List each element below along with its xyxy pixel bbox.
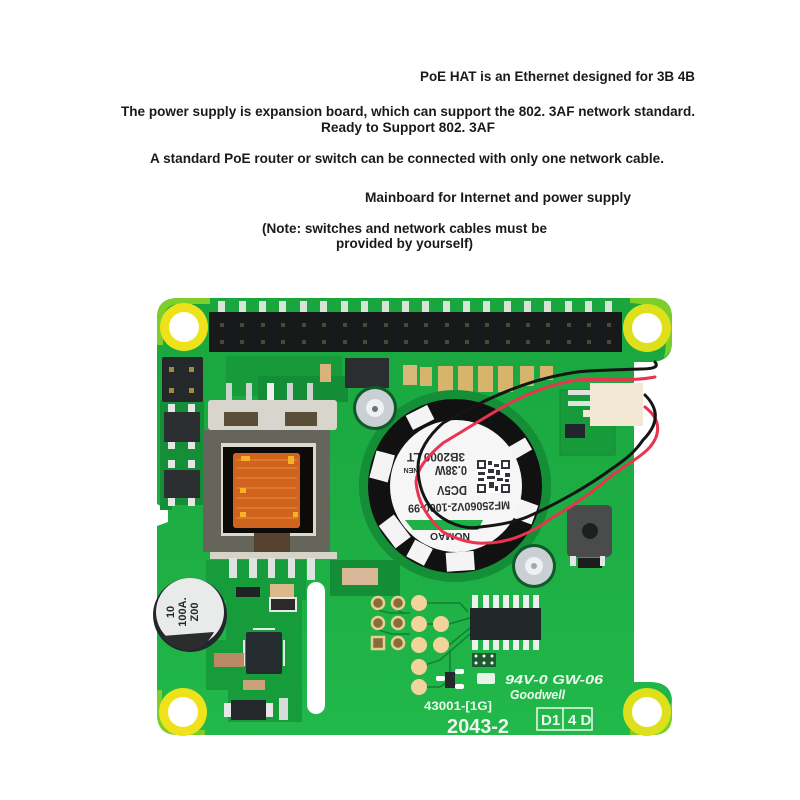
solder test pads [372, 595, 470, 695]
small SMD transistors on left [164, 404, 200, 506]
fan blades [369, 405, 538, 572]
description text block: (Note: switches and network cables must be [262, 220, 547, 236]
silkscreen text: 2043-2 [447, 716, 509, 738]
silkscreen text: Goodwell [510, 687, 565, 702]
electrolytic capacitor: 100A. [177, 597, 189, 627]
40-pin GPIO header [209, 301, 622, 352]
MOSFET near header [320, 358, 417, 388]
description text block: Ready to Support 802. 3AF [321, 119, 495, 135]
UL mark [477, 673, 495, 684]
fan sticker text [404, 450, 510, 514]
description text block: provided by yourself) [336, 235, 473, 251]
fan power wires [416, 362, 658, 543]
small passive components near chip [214, 568, 378, 690]
electrolytic capacitor: 10 [165, 606, 177, 618]
bottom diode [224, 698, 288, 720]
description text block [121, 68, 695, 251]
fan sticker text: MF25060V2-1000-99 [408, 498, 510, 514]
fan sticker text: 3B2000 LT [406, 450, 465, 464]
description text block: Mainboard for Internet and power supply [365, 189, 631, 205]
darker copper traces [160, 356, 615, 722]
QFN controller chip [243, 628, 285, 674]
silkscreen text: 4 D [568, 712, 592, 729]
fan bottom label strip [405, 520, 483, 541]
silkscreen text: 43001-[1G] [424, 699, 492, 713]
board slot cutout [307, 582, 325, 714]
mounting holes [159, 303, 671, 736]
board outline [157, 298, 672, 735]
fan sticker text: DC5V [437, 483, 467, 498]
fan sticker text: NEN [404, 466, 418, 473]
fan bottom label strip: NOMAO [430, 530, 470, 541]
description text block: A standard PoE router or switch can be connected with only one network cable. [150, 150, 664, 166]
fan sticker text: 0.38W [434, 463, 467, 478]
SOIC chip [470, 595, 541, 667]
silkscreen text: D1 [541, 712, 560, 729]
row of SMD capacitors [420, 366, 553, 392]
cooling fan [359, 390, 551, 582]
description text block: PoE HAT is an Ethernet designed for 3B 4B [420, 68, 695, 84]
SOT-23 small transistor [436, 669, 464, 689]
silkscreen text: 94V-0 GW-06 [505, 672, 604, 687]
PoE HAT circuit board photo [153, 298, 672, 738]
flyback transformer [203, 383, 337, 580]
4-pin small header [162, 357, 203, 402]
silkscreen text [424, 672, 604, 738]
white fan connector [565, 383, 643, 438]
buzzer [567, 505, 612, 568]
board corner highlights [157, 298, 672, 735]
QR code on fan sticker [477, 460, 510, 493]
description text block: The power supply is expansion board, which can support the 802. 3AF network standard. [121, 103, 695, 119]
mounting screws [353, 386, 556, 588]
electrolytic capacitor [153, 578, 227, 652]
electrolytic capacitor: Z00 [189, 603, 201, 621]
